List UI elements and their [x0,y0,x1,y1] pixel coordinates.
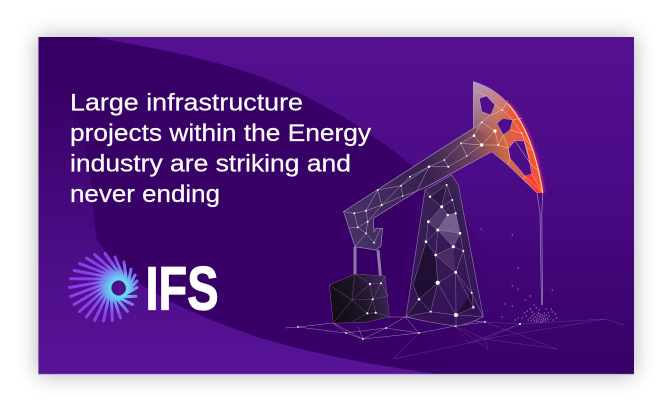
counterweight nodes [366,282,382,314]
headline: Large infrastructure [70,90,303,116]
walking beam and horse head [344,82,543,250]
pump jack [329,82,543,327]
tower facets [406,185,473,317]
beam nodes [353,109,522,244]
oil stream [537,193,543,305]
tower mesh [406,185,483,326]
counterweight mesh [329,274,389,323]
logo swirl icon [70,254,137,321]
card background [38,37,634,375]
tower [406,175,483,327]
headline: never ending [70,181,220,208]
head top highlight [473,82,512,135]
connecting rods [355,247,380,277]
headline [70,90,372,208]
counterweight [329,274,389,323]
bright head rim [473,82,543,193]
head edge glow [473,82,543,193]
infographic card [38,37,634,374]
card shadow [38,37,634,374]
IFS logo [70,254,218,322]
beam mesh [344,90,543,247]
tower nodes [418,184,475,327]
logo wordmark: IFS [146,254,218,322]
ground nodes [297,321,521,340]
ground mesh [285,317,624,359]
red facet [525,174,543,193]
oil droplets [481,229,557,322]
headline: industry are striking and [70,150,351,178]
beam body [344,82,543,250]
headline: projects within the Energy [70,120,372,147]
